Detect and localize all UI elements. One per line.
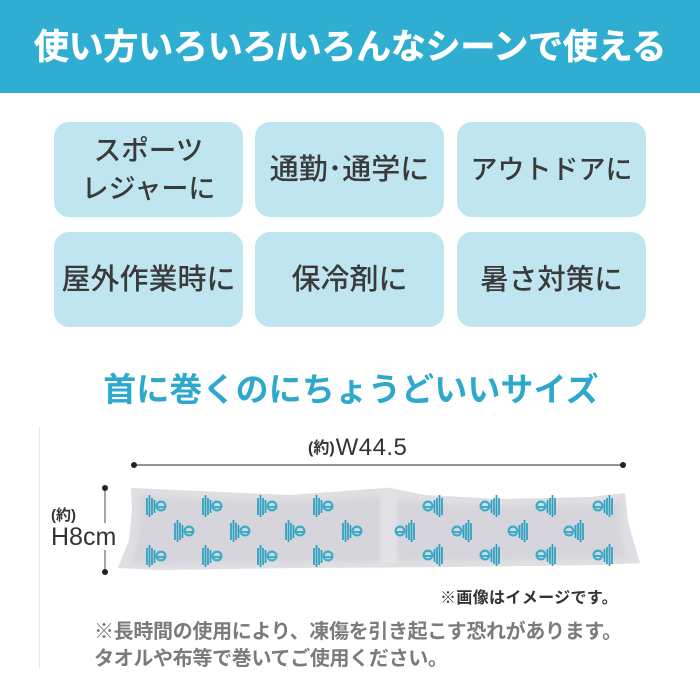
size heading: 首に巻くのにちょうどいいサイズ xyxy=(103,371,599,408)
height dimension line xyxy=(102,485,108,575)
height label: H8cm xyxy=(51,523,116,551)
card: outdoor work xyxy=(54,232,243,327)
card: sports and leisure xyxy=(54,122,243,217)
card: cold pack xyxy=(255,232,444,327)
image note: ※画像はイメージです。 xyxy=(440,590,618,607)
card: heat protection: 暑さ対策に xyxy=(480,264,623,296)
left pale vertical rule xyxy=(39,426,40,668)
width label: (約)W44.5 xyxy=(308,434,407,461)
printed marks right half xyxy=(396,495,612,566)
height label: (約) xyxy=(51,507,76,524)
card: commuting xyxy=(255,122,444,217)
card: cold pack: 保冷剤に xyxy=(291,264,408,296)
caution text: タオルや布等で巻いてご使用ください。 xyxy=(94,648,448,670)
caution text xyxy=(94,620,622,670)
card: outdoor work: 屋外作業時に xyxy=(61,264,236,296)
pack body xyxy=(118,488,640,570)
card: outdoor: アウトドアに xyxy=(470,154,632,184)
inner panel xyxy=(132,495,626,564)
card: sports and leisure: スポーツ xyxy=(94,134,203,166)
card: outdoor xyxy=(457,122,646,217)
header band xyxy=(0,0,700,93)
cold pack product image xyxy=(118,488,640,570)
width dimension line xyxy=(131,462,626,468)
centre seam xyxy=(380,490,398,565)
printed marks left half xyxy=(147,495,361,567)
height label xyxy=(51,507,116,551)
caution text: ※長時間の使用により、凍傷を引き起こす恐れがあります。 xyxy=(94,621,622,643)
card: heat protection xyxy=(457,232,646,327)
card: sports and leisure: レジャーに xyxy=(82,174,215,204)
title: 使い方いろいろ/いろんなシーンで使える xyxy=(34,28,666,67)
card: commuting: 通勤･通学に xyxy=(270,154,429,186)
